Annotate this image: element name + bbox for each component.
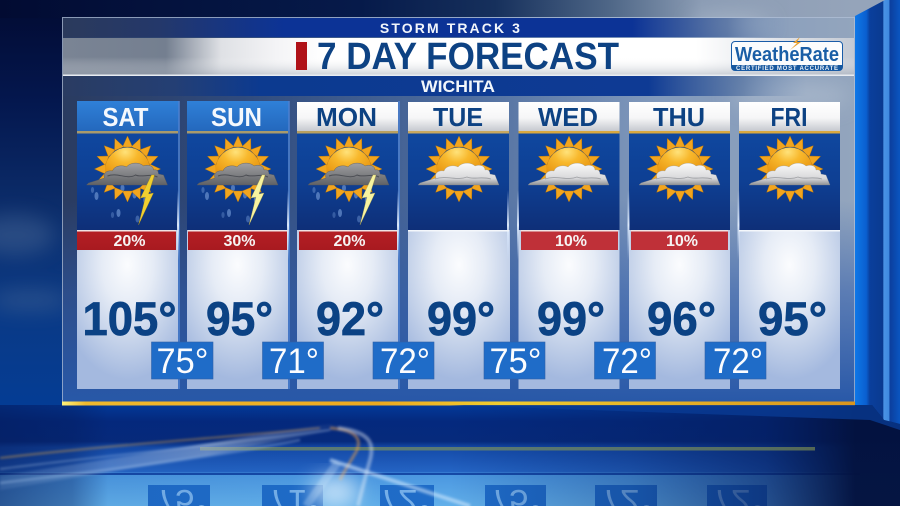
- card: SUN: 30%: [223, 233, 256, 250]
- low temperatures: 72°: [713, 342, 763, 381]
- card: TUE: [408, 102, 510, 389]
- card: MON: [297, 101, 400, 389]
- card: SAT: SAT: [102, 102, 149, 132]
- card: FRI: [738, 102, 840, 389]
- top bar: station name: [63, 18, 854, 37]
- low temperatures: 72°: [602, 342, 652, 381]
- red marker: [296, 42, 307, 70]
- horizon line: [200, 447, 815, 450]
- low temperatures: 75°: [490, 342, 542, 381]
- city band: [63, 76, 854, 96]
- card: SUN: [187, 101, 290, 389]
- logo: WeatheRate: WeatheRate: [735, 43, 839, 66]
- low temperatures: [152, 342, 766, 381]
- light streaks: [0, 424, 470, 506]
- card: WED: 99°: [537, 292, 605, 345]
- low temperatures: 71°: [269, 342, 319, 381]
- floor with reflections: [0, 405, 900, 506]
- card: TUE: TUE: [433, 102, 483, 132]
- right pillar: [450, 0, 900, 430]
- icon: sun, storm cloud, rain and lightning: [86, 136, 168, 225]
- card: THU: 10%: [666, 233, 698, 250]
- low temperatures: 75°: [156, 342, 208, 381]
- logo: WeatheRate: [732, 37, 842, 72]
- logo: WeatheRate: CERTIFIED MOST ACCURATE: [736, 66, 838, 72]
- icon: sun and cloud: [639, 136, 720, 202]
- card: SAT: 105°: [82, 292, 176, 345]
- city band: WICHITA: [421, 77, 495, 96]
- low temperatures: 72°: [380, 342, 430, 381]
- card: THU: 96°: [647, 292, 716, 345]
- icon: sun, storm cloud, rain and lightning: [308, 136, 389, 225]
- card: THU: [628, 102, 730, 389]
- gold rule: [62, 402, 855, 406]
- icon: sun and cloud: [418, 136, 499, 202]
- card: FRI: 95°: [758, 292, 827, 345]
- card: MON: 92°: [316, 292, 384, 345]
- card: MON: MON: [316, 102, 377, 132]
- icon: sun and cloud: [528, 136, 609, 202]
- reflected low temperature boxes: [148, 482, 767, 506]
- card: TUE: 99°: [427, 292, 495, 345]
- card: WED: 10%: [555, 233, 587, 250]
- card: WED: [517, 102, 620, 389]
- main panel: [62, 14, 855, 403]
- top bar: station name: STORM TRACK 3: [380, 20, 522, 36]
- card: SUN: 95°: [206, 292, 273, 345]
- reflected panel band: [0, 473, 860, 475]
- icon: sun, storm cloud, rain and lightning: [197, 136, 278, 225]
- icon: sun and cloud: [749, 136, 830, 202]
- card: FRI: FRI: [770, 102, 808, 132]
- card: SAT: [77, 101, 180, 389]
- card: SAT: 20%: [113, 233, 146, 250]
- title: 7 DAY FORECAST: [317, 36, 619, 78]
- card: WED: WED: [538, 102, 598, 132]
- title bar: [63, 36, 854, 78]
- card: THU: THU: [653, 102, 705, 132]
- card: SUN: SUN: [211, 102, 262, 132]
- card: MON: 20%: [333, 233, 366, 250]
